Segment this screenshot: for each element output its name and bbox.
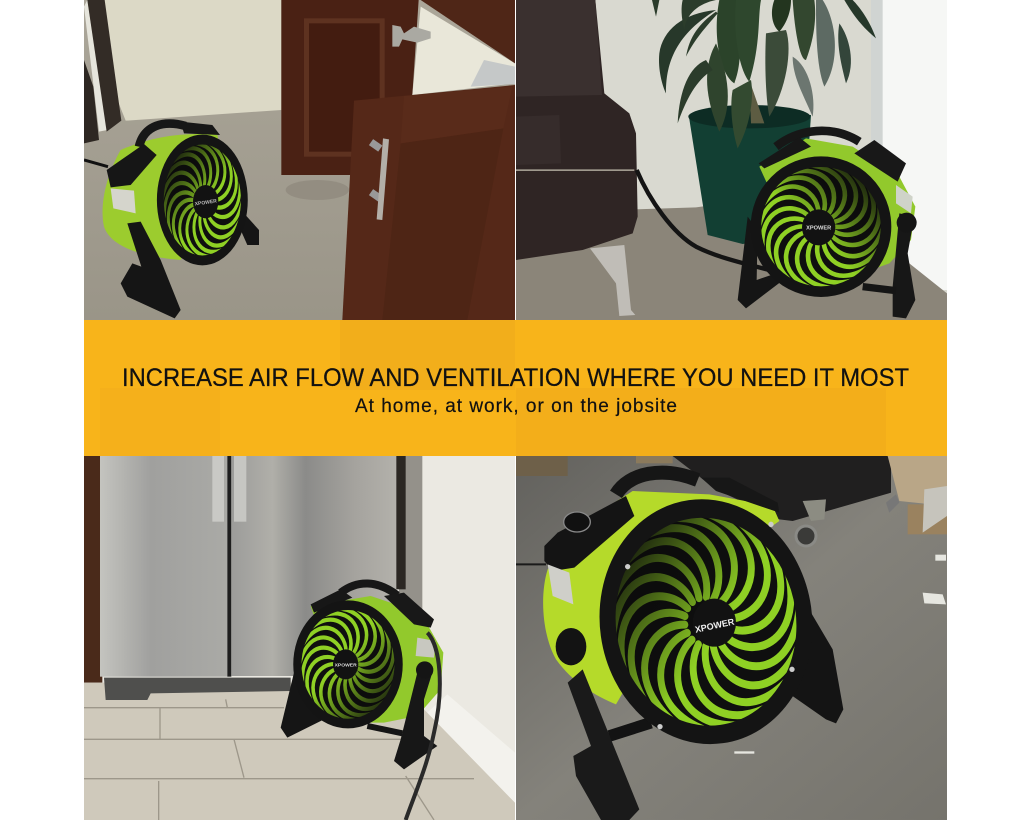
fan: green fan, refrigerator [281, 583, 443, 820]
cardboard box [888, 456, 947, 534]
fan: small green fan, left [103, 122, 259, 318]
upper cabinet door [281, 0, 419, 175]
banner background [84, 320, 947, 456]
plant pot [688, 105, 811, 244]
carpet floor [516, 200, 947, 320]
banner subheading: At home, at work, or on the jobsite [355, 396, 677, 417]
banner heading: INCREASE AIR FLOW AND VENTILATION WHERE YOU NEED IT MOST [122, 364, 909, 392]
fan: large green fan: XPOWER [694, 616, 736, 635]
fan: large green fan [543, 473, 843, 820]
fan: green fan, refrigerator: XPOWER [335, 662, 357, 668]
power cord [637, 170, 769, 270]
power cord [84, 160, 108, 167]
floor debris [734, 555, 946, 754]
fan: small green fan, left: XPOWER [194, 198, 218, 207]
panel: fan beside refrigerator [84, 456, 515, 820]
sofa [516, 0, 638, 316]
panel: fan beside kitchen cabinets [84, 0, 515, 320]
wall [104, 0, 281, 121]
fan: green fan, right: XPOWER [806, 225, 831, 231]
refrigerator [100, 456, 396, 677]
plant leaves [652, 0, 876, 148]
tiled floor [84, 678, 515, 820]
lower cabinet door with handle [342, 85, 515, 320]
panel: fan beside sofa and plant [516, 0, 947, 320]
cabinet interior [412, 7, 515, 95]
floor shadow [286, 180, 349, 200]
fan: green fan, right [738, 131, 917, 318]
icon: cabinet hinge [392, 25, 431, 47]
cart with caster wheel [673, 456, 899, 546]
panel: close-up fan on concrete floor [516, 456, 947, 820]
